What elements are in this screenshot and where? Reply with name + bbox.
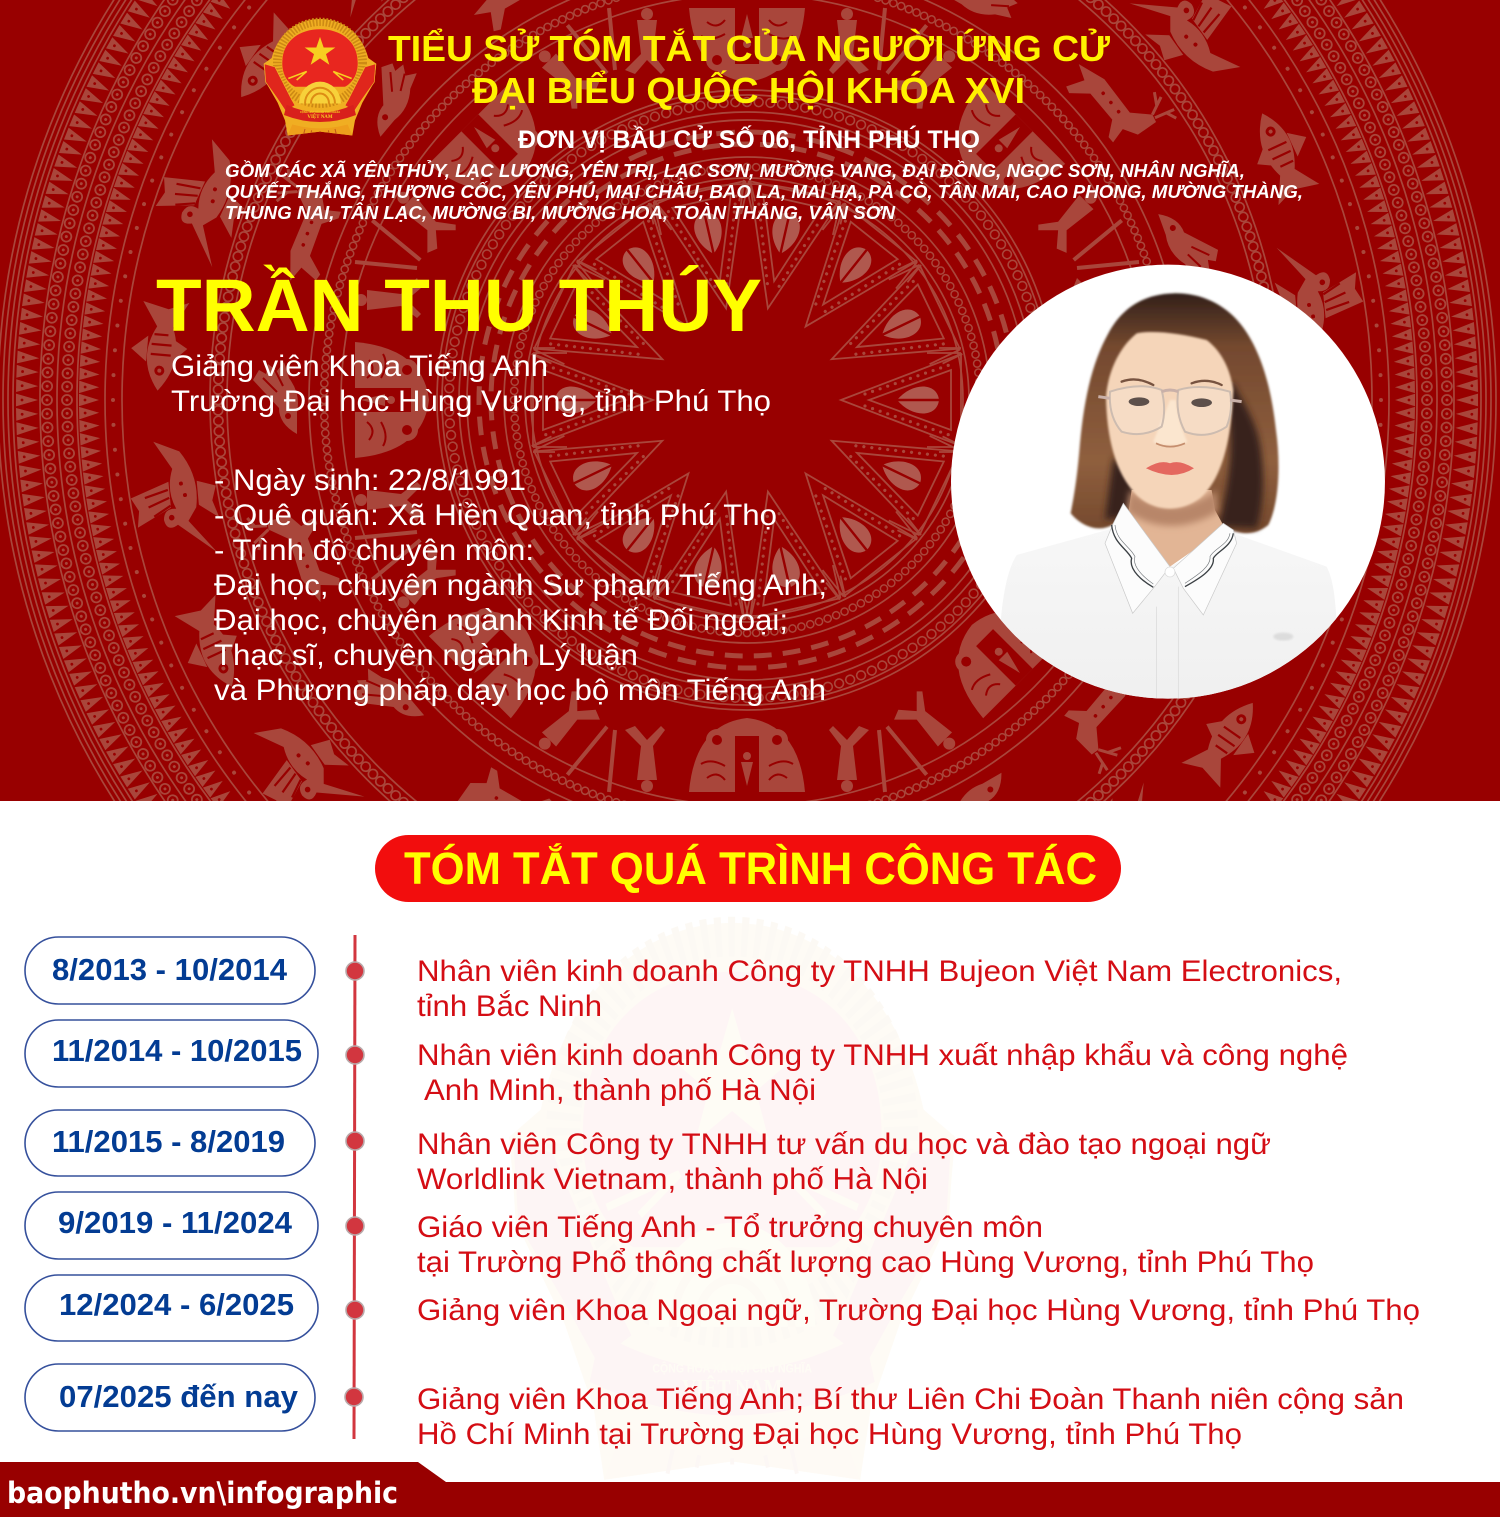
text block: job 6: Giảng viên Khoa Tiếng Anh; Bí thư Liên Chi Đoàn Thanh niên cộng sản (417, 1383, 1404, 1416)
date pill: 11/2015 - 8/2019: 11/2015 - 8/2019 (52, 1124, 285, 1159)
panel: white career section (0, 801, 1500, 1517)
footer band (0, 1462, 1500, 1517)
title: ĐẠI BIỂU QUỐC HỘI KHÓA XVI (472, 69, 1025, 111)
date pill: 8/2013 - 10/2014: 8/2013 - 10/2014 (52, 952, 288, 987)
watermark emblem (509, 923, 955, 1480)
text block: job 1: Nhân viên kinh doanh Công ty TNHH Bujeon Việt Nam Electronics, (417, 955, 1342, 988)
text block: job 2: Anh Minh, thành phố Hà Nội (424, 1074, 816, 1107)
text block: communes list: QUYẾT THẮNG, THƯỢNG CỐC, YÊN PHÚ, MAI CHÂU, BAO LA, MAI HẠ, PÀ CÒ, TÂN MAI, CAO PHONG, MƯỜNG THÀNG, (225, 181, 1303, 202)
text block: job 6 (417, 1383, 1404, 1451)
text block: personal details: Thạc sĩ, chuyên ngành Lý luận (214, 639, 638, 672)
text block: job 4 (417, 1211, 1314, 1279)
title: TIỂU SỬ TÓM TẮT CỦA NGƯỜI ỨNG CỬ (388, 27, 1110, 69)
heading pill: career summary: TÓM TẮT QUÁ TRÌNH CÔNG TÁC (404, 843, 1097, 894)
date pill: 11/2014 - 10/2015: 11/2014 - 10/2015 (52, 1033, 302, 1068)
icon: national emblem (264, 19, 376, 135)
title (388, 27, 1110, 111)
text block: job 3 (417, 1128, 1271, 1196)
date pill: 9/2019 - 11/2024: 9/2019 - 11/2024 (58, 1205, 293, 1240)
text block: personal details: - Trình độ chuyên môn: (214, 534, 534, 567)
text block: job 5: Giảng viên Khoa Ngoại ngữ, Trường Đại học Hùng Vương, tỉnh Phú Thọ (417, 1294, 1420, 1327)
text block: job 2 (417, 1039, 1348, 1107)
text block: job 1: tỉnh Bắc Ninh (417, 990, 602, 1023)
date pill: 12/2024 - 6/2025: 12/2024 - 6/2025 (59, 1287, 294, 1322)
text block: personal details: - Quê quán: Xã Hiền Quan, tỉnh Phú Thọ (214, 499, 777, 532)
text block: personal details: - Ngày sinh: 22/8/1991 (214, 464, 526, 497)
text block: personal details: Đại học, chuyên ngành Kinh tế Đối ngoại; (214, 604, 788, 637)
subtitle: constituency: ĐƠN VỊ BẦU CỬ SỐ 06, TỈNH PHÚ THỌ (518, 124, 980, 154)
date pill: 07/2025 đến nay: 07/2025 đến nay (59, 1379, 299, 1414)
panel: red header background with bronze drum pattern (0, 0, 1500, 801)
text block: position: Giảng viên Khoa Tiếng Anh (171, 350, 548, 383)
date pill: 8/2013 - 10/2014 (25, 937, 315, 1004)
date pill: 9/2019 - 11/2024 (25, 1192, 318, 1259)
text block: personal details (214, 464, 827, 707)
text block: job 1 (417, 955, 1342, 1023)
text block: job 3: Nhân viên Công ty TNHH tư vấn du học và đào tạo ngoại ngữ (417, 1128, 1271, 1161)
date pill: 07/2025 đến nay (25, 1364, 315, 1431)
heading: candidate name: TRẦN THU THÚY (156, 264, 762, 347)
text block: position: Trường Đại học Hùng Vương, tỉnh Phú Thọ (171, 385, 771, 418)
date pill: 11/2014 - 10/2015 (25, 1020, 318, 1087)
text block: job 4: Giáo viên Tiếng Anh - Tổ trưởng chuyên môn (417, 1211, 1043, 1244)
timeline line and dots (345, 935, 364, 1439)
footer band: baophutho.vn\infographic (7, 1476, 398, 1510)
text block: communes list: GỒM CÁC XÃ YÊN THỦY, LẠC LƯƠNG, YÊN TRỊ, LẠC SƠN, MƯỜNG VANG, ĐẠI ĐỒNG, NGỌC SƠN, NHÂN NGHĨA, (225, 160, 1245, 181)
text block: communes list: THUNG NAI, TÂN LẠC, MƯỜNG BI, MƯỜNG HOA, TOÀN THẮNG, VÂN SƠN (225, 202, 896, 223)
text block: position (171, 350, 771, 418)
text block: job 3: Worldlink Vietnam, thành phố Hà Nội (417, 1163, 928, 1196)
text block: communes list (225, 160, 1303, 223)
date pill: 11/2015 - 8/2019 (25, 1110, 315, 1176)
date pill: 12/2024 - 6/2025 (25, 1275, 318, 1341)
text block: personal details: và Phương pháp dạy học bộ môn Tiếng Anh (214, 674, 826, 707)
text block: personal details: Đại học, chuyên ngành Sư phạm Tiếng Anh; (214, 569, 827, 602)
bronze drum pattern (0, 0, 1497, 801)
text block: job 6: Hồ Chí Minh tại Trường Đại học Hùng Vương, tỉnh Phú Thọ (417, 1418, 1242, 1451)
portrait photo (951, 265, 1385, 717)
text block: job 2: Nhân viên kinh doanh Công ty TNHH xuất nhập khẩu và công nghệ (417, 1039, 1348, 1072)
text block: job 4: tại Trường Phổ thông chất lượng cao Hùng Vương, tỉnh Phú Thọ (417, 1246, 1314, 1279)
